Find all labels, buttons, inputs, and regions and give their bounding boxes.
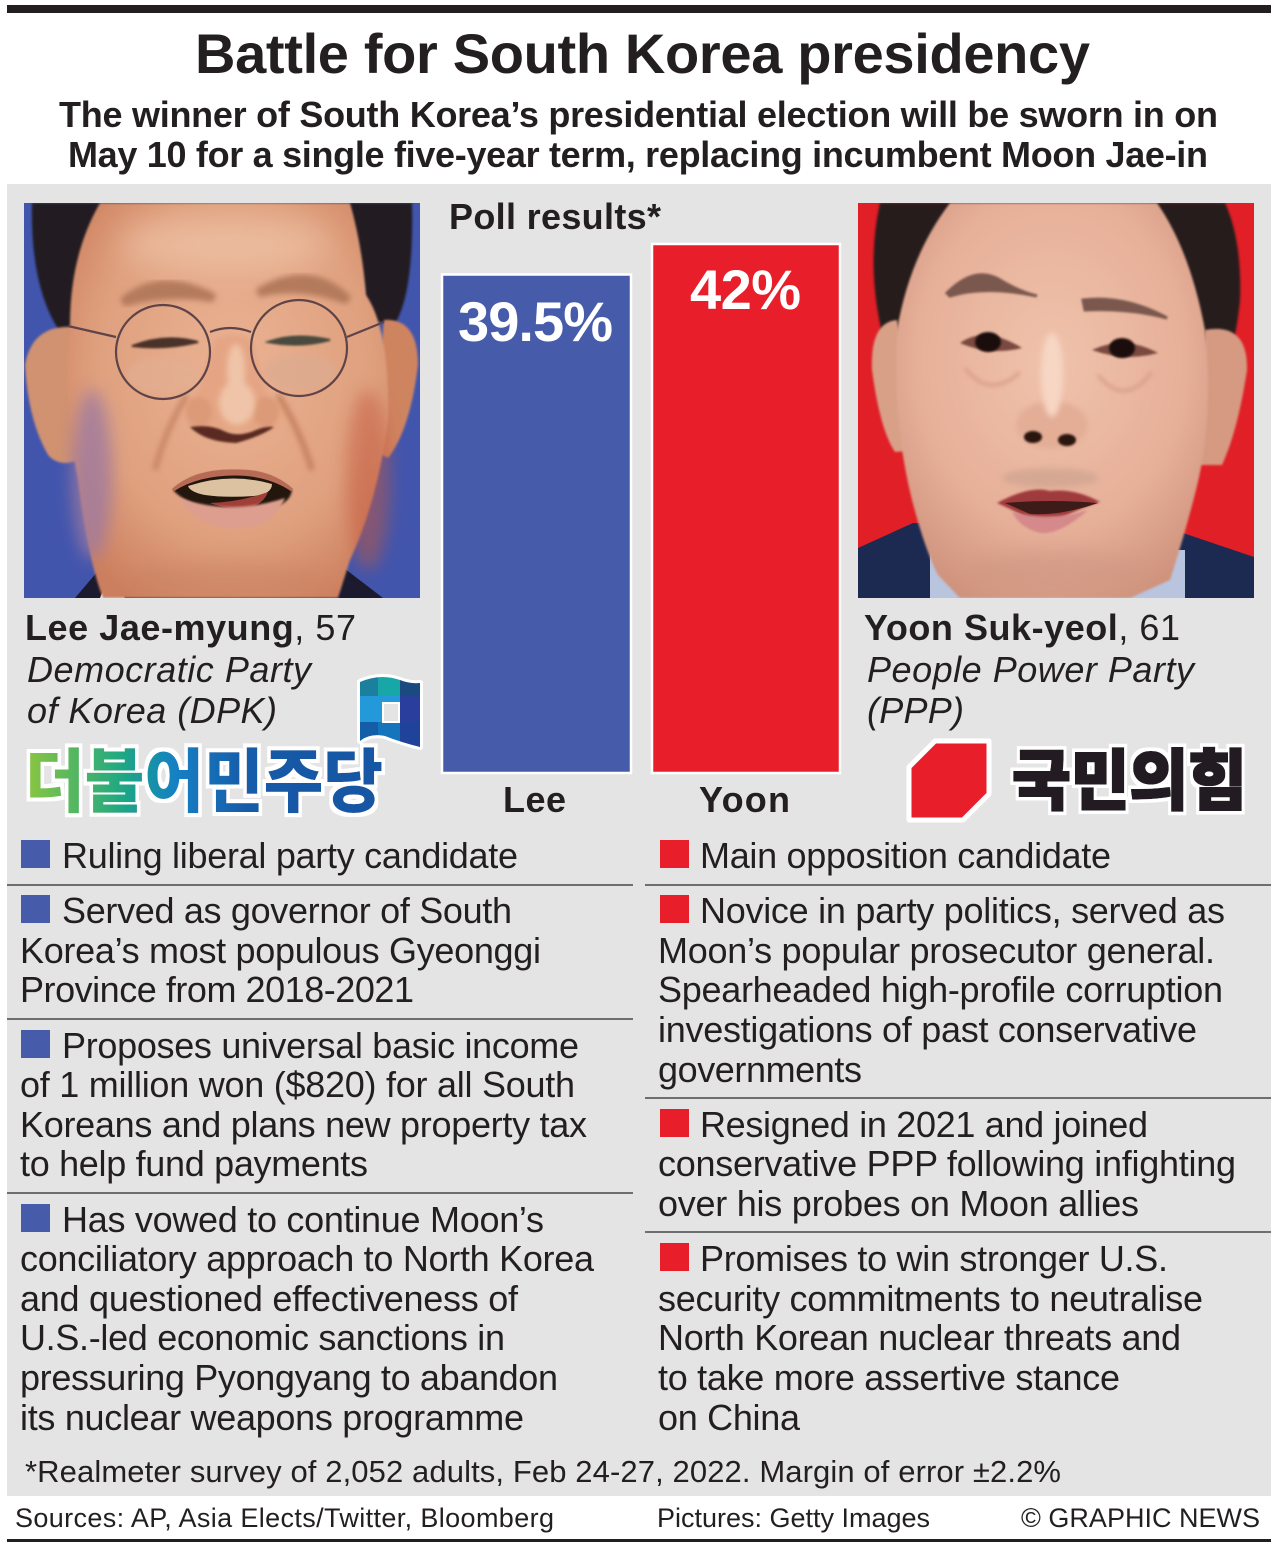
bar: Lee 39.5% — [442, 274, 631, 773]
bullet: prosecutor: Spearheaded high-profile corruption — [658, 969, 1223, 1010]
bullet: North Korea: its nuclear weapons programme — [20, 1397, 524, 1438]
bar: Yoon 42% — [652, 244, 840, 773]
bullet: U.S. security: on China — [658, 1397, 801, 1438]
subtitle — [59, 94, 1218, 175]
nose — [1018, 402, 1086, 448]
icon: PPP red hexagon — [909, 741, 989, 820]
bullet: resigned: conservative PPP following infighting — [658, 1143, 1236, 1184]
bullet: resigned: Resigned in 2021 and joined — [700, 1104, 1148, 1145]
bullet: North Korea: conciliatory approach to North Korea — [20, 1238, 595, 1279]
bullet: resigned: over his probes on Moon allies — [658, 1183, 1139, 1224]
bar label: Yoon: Yoon — [699, 779, 790, 820]
copyright: © GRAPHIC NEWS — [1021, 1503, 1260, 1533]
bullet: governor: Korea’s most populous Gyeonggi — [20, 930, 541, 971]
bullet: prosecutor: Novice in party politics, served as — [700, 890, 1225, 931]
bullet: basic income: of 1 million won ($820) for all South — [20, 1064, 575, 1105]
glasses — [68, 300, 384, 399]
poll results heading: Poll results* — [449, 196, 661, 237]
mouth — [173, 471, 292, 512]
bullet: ruling liberal: Ruling liberal party candidate — [62, 835, 518, 876]
bullet: prosecutor: governments — [658, 1049, 862, 1090]
collar — [930, 550, 1185, 598]
picture credit: Pictures: Getty Images — [657, 1503, 930, 1533]
bottom rule — [7, 1539, 1271, 1542]
bullet: governor: Served as governor of South — [62, 890, 512, 931]
bullet: U.S. security: Promises to win stronger U.S. — [700, 1238, 1168, 1279]
bar: Yoon 42%: 42% — [690, 258, 801, 321]
candidate info: Yoon: People Power Party — [867, 649, 1196, 690]
icon: DPK flag logo — [360, 670, 420, 750]
bullet: North Korea: pressuring Pyongyang to abandon — [20, 1357, 558, 1398]
suit — [858, 523, 1254, 598]
candidate info: Yoon — [864, 607, 1196, 731]
subtitle: May 10 for a single five-year term, replacing incumbent Moon Jae-in — [68, 134, 1208, 175]
candidate info: Yoon: (PPP) — [867, 690, 964, 731]
nasolabial folds — [155, 395, 187, 470]
bullet: U.S. security: North Korean nuclear threats and — [658, 1317, 1181, 1358]
bullet: North Korea: U.S.-led economic sanctions in — [20, 1317, 505, 1358]
logo: DPK wordmark: 더불어민주당 — [25, 743, 383, 821]
candidate info: Lee: of Korea (DPK) — [27, 690, 277, 731]
eyebrows — [123, 285, 214, 302]
bullet: prosecutor: Moon’s popular prosecutor general. — [658, 930, 1215, 971]
subtitle: The winner of South Korea’s presidential election will be sworn in on — [59, 94, 1218, 135]
bar label: Lee: Lee — [503, 779, 566, 820]
bullet: governor — [20, 890, 541, 1010]
photo: Lee Jae-myung — [24, 203, 420, 598]
bullet: main opposition: Main opposition candidate — [700, 835, 1111, 876]
bullet: U.S. security: security commitments to neutralise — [658, 1278, 1203, 1319]
hair — [872, 203, 1242, 342]
bullet: U.S. security: to take more assertive stance — [658, 1357, 1120, 1398]
top rule — [7, 5, 1271, 13]
logo: PPP wordmark: 국민의힘 — [1012, 745, 1247, 819]
bullet: basic income: Proposes universal basic income — [62, 1025, 579, 1066]
bullet: prosecutor — [658, 890, 1225, 1090]
candidate info: Lee — [25, 607, 356, 731]
photo: Yoon Suk-yeol — [858, 203, 1254, 598]
nose — [200, 336, 264, 424]
candidate info: Lee: Lee Jae-myung, 57 — [25, 607, 356, 648]
bullet: basic income: Koreans and plans new property tax — [20, 1104, 587, 1145]
face — [896, 203, 1208, 598]
eyes — [960, 335, 1022, 351]
bullet: basic income: to help fund payments — [20, 1143, 368, 1184]
bullet: North Korea: Has vowed to continue Moon’s — [62, 1199, 544, 1240]
face — [67, 203, 388, 598]
bullet: prosecutor: investigations of past conservative — [658, 1009, 1197, 1050]
candidate info: Yoon: Yoon Suk-yeol, 61 — [864, 607, 1180, 648]
eyes — [132, 338, 198, 347]
suit — [75, 570, 383, 598]
ears — [870, 318, 904, 454]
column: Yoon policy bullets — [645, 835, 1271, 1438]
eyebrows — [947, 275, 1037, 296]
footnote: *Realmeter survey of 2,052 adults, Feb 24-27, 2022. Margin of error ±2.2% — [25, 1454, 1061, 1489]
bullet: resigned — [658, 1104, 1236, 1224]
title: Battle for South Korea presidency — [195, 22, 1090, 85]
column: Lee policy bullets — [7, 835, 633, 1438]
source credit: Sources: AP, Asia Elects/Twitter, Bloomberg — [15, 1503, 554, 1533]
bullet: North Korea — [20, 1199, 595, 1438]
bullet: North Korea: and questioned effectiveness of — [20, 1278, 519, 1319]
bar: Lee 39.5%: 39.5% — [458, 290, 613, 353]
ears — [25, 327, 78, 463]
candidate info: Lee: Democratic Party — [27, 649, 313, 690]
bullet: basic income — [20, 1025, 587, 1184]
bullet: governor: Province from 2018-2021 — [20, 969, 414, 1010]
bullet: U.S. security — [658, 1238, 1203, 1438]
mouth — [996, 488, 1100, 518]
hair — [32, 203, 412, 335]
